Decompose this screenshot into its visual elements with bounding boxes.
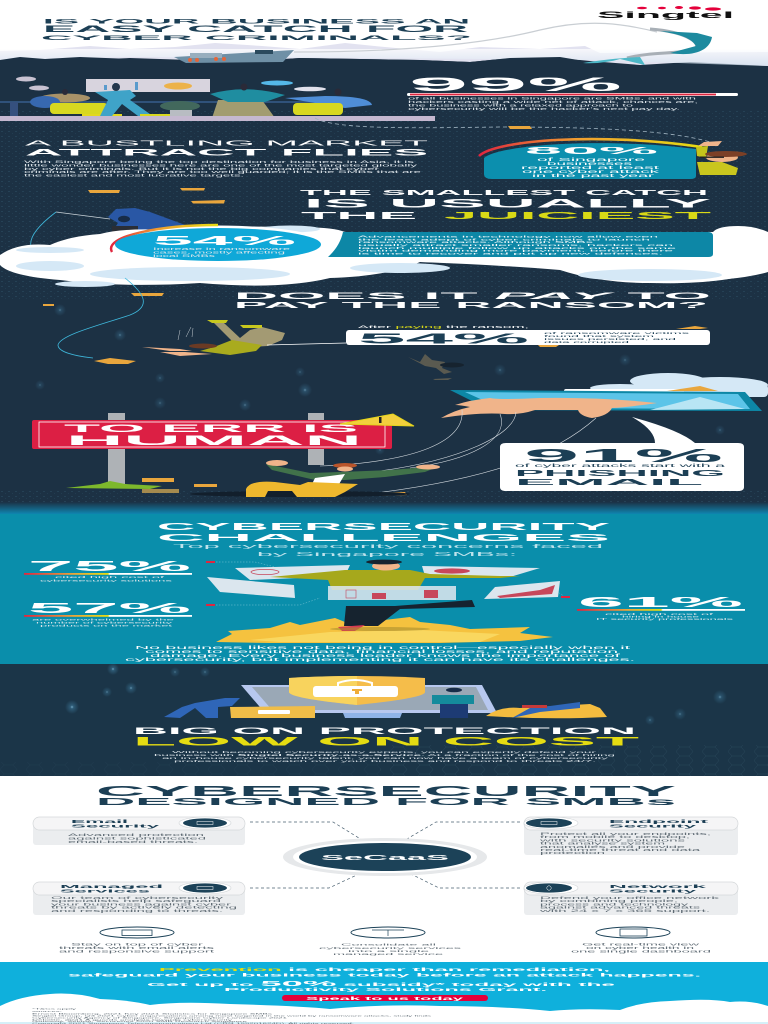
stat: 61%: [577, 594, 745, 621]
center node: SeCaaS: SeCaaS: [321, 853, 449, 862]
panel: ransomware paragraph: is time to recover and put up new defences.: [358, 251, 664, 255]
panel: network security: process and technology: [540, 902, 689, 906]
text: bustling market paragraph: little wonder businesses here are one of the most targeted globally: [24, 163, 419, 167]
panel: managed services: your business against cyber: [51, 902, 235, 906]
dashed connector: [315, 118, 710, 142]
puppet strings: [320, 410, 596, 496]
illustration: peeking person: [696, 141, 747, 175]
panel: network security: [524, 882, 738, 915]
panel: managed services: Services: [60, 889, 153, 894]
panel: 80% stat: [479, 139, 702, 179]
heading: smallest catch: IS USUALLY: [304, 198, 713, 210]
sign: to err is human: [32, 420, 392, 449]
heading: cybersecurity challenges: Top cybersecurity concerns faced: [173, 544, 603, 550]
benefit: email alerts: [59, 927, 215, 953]
benefit: single dashboard: on cyber health in: [586, 946, 694, 950]
panel: managed services: [33, 882, 245, 915]
button: speak to us today: [282, 995, 488, 1001]
panel: 54% pay ransom: data corrupted: [544, 340, 630, 344]
heading: cybersecurity challenges: by Singapore SMBs:: [257, 552, 519, 558]
stat: 99%: hackers casting a wide net of attack, chances are,: [408, 100, 698, 104]
panel: endpoint security: that analyse system: [540, 842, 666, 846]
illustration: giant hand: [441, 398, 657, 418]
text: challenges paragraph: damage. Every business leader knows the importance of: [150, 653, 624, 658]
panel: email security: Email: [71, 819, 128, 824]
stat badge: 54% ransomware increase: cases, mostly affecting: [153, 251, 286, 255]
text: challenges paragraph: comes to sensitive data, financial losses, and reputation: [145, 649, 621, 654]
panel: ransomware paragraph: [328, 232, 713, 257]
heading: a bustling market: ATTRACT FLIES: [25, 148, 431, 158]
panel: network security: Defend your office network: [540, 896, 721, 900]
panel: ransomware paragraph: ransomware attacks. Although SMBs: [358, 240, 595, 244]
panel: 54% pay ransom: issues persisted, and: [544, 337, 678, 341]
text: footnotes: Deloitte, 2021 A guards analysis towards cybersecurity: [32, 1018, 236, 1021]
stat: 57%: number of cybersecurity: [36, 620, 174, 624]
panel: endpoint security: Endpoint: [609, 819, 711, 824]
panel: 91% phishing email: EMAIL: [515, 477, 703, 487]
benefit: email alerts: threats with email alerts: [59, 946, 215, 950]
panel: 91% phishing email: of cyber attacks start with a: [515, 463, 728, 468]
callout line: [267, 343, 346, 345]
benefit: single dashboard: one single dashboard: [571, 949, 711, 953]
illustration: office team: [0, 76, 435, 121]
text: challenges paragraph: cybersecurity, but implementing it can have its challenges.: [125, 657, 635, 662]
benefit: single managed service: into a single: [348, 949, 430, 953]
stat: 99%: 99%: [409, 75, 623, 96]
panel: 80% stat: in the past year: [532, 173, 656, 178]
heading: smallest catch: JUICIEST: [444, 211, 711, 222]
heading: a bustling market: [25, 141, 432, 158]
background: glowing network dots: [0, 304, 768, 514]
heading: does it pay: DOES IT PAY TO: [234, 290, 711, 301]
gold pile: [216, 617, 553, 643]
illustration: falling victim: [142, 320, 285, 356]
text: challenges paragraph: No business likes not being in control—especially when it: [135, 645, 634, 650]
panel: email security: Security: [71, 824, 162, 828]
heading: smallest catch: [300, 188, 713, 222]
stat: 57%: 57%: [28, 600, 191, 617]
panel: managed services: Our team of cybersecurity: [51, 896, 225, 900]
panel: managed services: specialists help safeguard: [51, 899, 222, 903]
illustration: tablet: [450, 390, 762, 411]
section: cyan call to action background: [0, 962, 768, 1024]
stat badge: 54% ransomware increase: Increase in ransomware: [153, 247, 291, 251]
text: prevention message: [68, 967, 701, 993]
heading: does it pay: [234, 290, 711, 310]
illustration: sign posts: [108, 413, 324, 485]
panel: 54% pay ransom: [346, 325, 710, 348]
icon: warning triangle: [340, 414, 414, 426]
dashed connectors: [250, 822, 520, 888]
illustration: kneeling puppet person: [190, 460, 440, 497]
panel: email security: email-based threats.: [68, 840, 198, 844]
panel: endpoint security: Security: [609, 824, 699, 828]
heading: does it pay: PAY THE RANSOM?: [234, 301, 709, 310]
panel: managed services: Managed: [60, 884, 165, 889]
illustration: hooded hacker fishing: [31, 208, 188, 258]
logo: Singtel: Singtel: [597, 10, 734, 21]
sign: to err is human: HUMAN: [66, 433, 362, 448]
fishing line below cloud: [58, 278, 143, 358]
panel: endpoint security: real-time threat and data: [540, 848, 701, 852]
heading: cybersecurity challenges: CYBERSECURITY: [157, 522, 612, 533]
text: bustling market paragraph: the easiest and most lucrative targets.: [24, 174, 244, 178]
text: footnotes: Singtel Group, Q3 2021 Cyber organisations among most targeted in the world by ransomware attacks, study finds: [32, 1014, 431, 1017]
logo: Singtel: [597, 6, 734, 21]
benefit: email alerts: Stay on top of cyber: [71, 943, 207, 947]
panel: network security: Network: [609, 884, 709, 889]
stat: 61%: cited high cost of: [605, 612, 714, 616]
icon: envelope: [667, 386, 718, 391]
panel: ransomware paragraph: launch multiple follow up attacks on the same: [358, 246, 677, 250]
panel: network security: against advanced threats: [540, 906, 702, 910]
text: footnotes: *T&Cs apply: [32, 1008, 80, 1010]
stat: 61%: IT security professionals: [596, 617, 735, 621]
sign: to err is human: TO ERR IS: [64, 423, 358, 435]
panel: 91% phishing email: [500, 417, 744, 491]
panel: email security: Advanced protection: [68, 833, 204, 837]
benefit: single managed service: [319, 927, 463, 956]
text: bustling market paragraph: by cyber criminals. But it is not the big companies that cyber: [24, 167, 383, 171]
text: footnotes: sources:: [32, 1010, 64, 1013]
text: footnotes: Ernest Bloomberg, 2021 Key 2021 Statistics for Singapore SMBs: [32, 1012, 272, 1015]
clouds: footer: [0, 994, 768, 1024]
title: IS YOUR BUSINESS AN: [43, 18, 470, 26]
panel: 54% pay ransom: found that system: [544, 334, 656, 338]
heading: cybersecurity challenges: CHALLENGES: [157, 533, 612, 544]
heading: big on protection: [133, 726, 641, 748]
panel: endpoint security: [524, 817, 738, 855]
background: digital matrix texture: [0, 110, 768, 300]
text: protection paragraph: business with Singtel Security-as-a-Service . At a fraction of the cost of hiring: [154, 753, 616, 757]
heading: cybersecurity designed for SMBs: [96, 784, 678, 808]
title: EASY CATCH FOR: [43, 24, 470, 34]
panel: managed services: and responding to threats.: [51, 909, 223, 913]
text: footnotes: Gateway, Sektop, Securehex 2020 SMB Research Singapore: [32, 1020, 250, 1023]
panel: 54% pay ransom: After paying the ransom,: [358, 325, 529, 329]
illustration: standing man: [432, 688, 474, 718]
title: CYBER CRIMINALS?: [41, 35, 472, 42]
background: dark navy field: [0, 58, 768, 514]
heading: cybersecurity designed for SMBs: DESIGNED FOR SMBs: [96, 797, 678, 808]
text: bustling market paragraph: criminals are after. They are too well guarded; it is the SMBs that are: [24, 170, 422, 174]
benefit: single managed service: cybersecurity services: [319, 946, 463, 950]
panel: ransomware paragraph: the least adept of cyber criminals to launch: [358, 237, 651, 241]
panel: network security: by combining people,: [540, 899, 678, 903]
center node: SeCaaS: [283, 838, 487, 876]
text: prevention message: safeguard your business today before an attack happens.: [68, 972, 701, 978]
panel: endpoint security: anomalies and provide: [540, 845, 686, 849]
illustration: silhouette falling: [408, 354, 464, 380]
panel: endpoint security: from mobile to desktop,: [540, 835, 690, 839]
panel: network security: with 24 x 7 x 365 support.: [540, 909, 710, 913]
clouds: right: [564, 373, 768, 397]
text: prevention message: Get up to 50% subsidy* today with the: [147, 979, 617, 988]
stat: 99%: of all businesses in Singapore are SMBs, and with: [408, 96, 697, 100]
stat: 75%: 75%: [28, 558, 191, 575]
text: challenges paragraph: [125, 645, 635, 662]
heading: big on protection: BIG ON PROTECTION: [133, 726, 636, 736]
benefit: single managed service: managed service: [333, 952, 444, 956]
text: protection paragraph: professionals to watch over your business and respond to threats 24/7.: [174, 759, 597, 763]
heading: a bustling market: A BUSTLING MARKET: [25, 141, 432, 148]
panel: 91% phishing email: 91%: [524, 446, 723, 466]
panel: 80% stat: businesses: [547, 161, 635, 166]
panel: ransomware paragraph: Advancements in technology now allow even: [358, 235, 659, 239]
title: [41, 18, 472, 42]
panel: 54% pay ransom: of ransomware victims: [544, 331, 691, 335]
gold bar: [508, 126, 532, 129]
stat: 99%: cybersecurity will be the hacker's next pay day.: [408, 107, 680, 111]
gold bars: bottom: [142, 478, 407, 496]
clouds band: [0, 226, 768, 287]
benefit: single managed service: Consolidate all: [341, 943, 437, 947]
button: speak to us today: Speak to us today: [306, 996, 466, 1001]
panel: endpoint security: Protect all your endpoints,: [540, 832, 711, 836]
text: protection paragraph: [154, 750, 616, 763]
stat: 61%: hiring in house: [622, 615, 701, 619]
stat badge: 54% ransomware increase: local SMBs: [153, 254, 216, 258]
panel: 80% stat: reported at least: [521, 165, 662, 170]
panel: endpoint security: protection: [540, 851, 606, 855]
text: prevention message: Prevention is cheaper than remediation,: [159, 967, 613, 973]
stat badge: 54% ransomware increase: [108, 225, 328, 264]
stat: 61%: 61%: [578, 594, 743, 611]
panel: email security: against sophisticated: [68, 837, 206, 841]
benefit: single dashboard: [571, 927, 711, 953]
heading: cybersecurity designed for SMBs: CYBERSECURITY: [96, 784, 678, 800]
section: white services background: [0, 776, 768, 963]
stat: 75%: cited high cost of: [55, 575, 165, 579]
heading: cybersecurity challenges: [157, 522, 612, 558]
benefit: email alerts: and responsive support: [59, 949, 214, 953]
text: footnotes: Cybersecurity Agency of Singapore, Singapore Cyber Landscape 2021: [32, 1016, 290, 1019]
heading: big on protection: LOW ON COST: [133, 734, 641, 748]
mountains horizon: [0, 43, 768, 76]
panel: ransomware paragraph: usually attract smaller ransoms, hackers can: [358, 243, 674, 247]
text: bustling market paragraph: With Singapore being the top destination for business in Asia, it is: [24, 160, 416, 164]
panel: 54% pay ransom: 54%: [358, 330, 529, 348]
illustration: monitor with shield: [241, 676, 497, 718]
section: cybersecurity challenges background: [0, 514, 768, 665]
stat: 99%: [407, 75, 738, 111]
benefit: single dashboard: Get real-time view: [582, 943, 701, 947]
heading: smallest catch: THE SMALLEST CATCH: [300, 188, 708, 197]
connector dots: [206, 561, 570, 606]
panel: endpoint security: with security solutions: [540, 838, 687, 842]
grass: [66, 481, 162, 489]
gold bars: upper: [43, 188, 350, 306]
panel: ransomware paragraph: victim demanding more payment, before there: [358, 249, 674, 253]
stat badge: 54% ransomware increase: 54%: [153, 233, 298, 248]
stat: 57%: products on the market: [40, 623, 173, 627]
text: footnotes: [32, 1008, 431, 1024]
panel: managed services: threats by actively detecting: [51, 906, 238, 910]
panel: 80% stat: 80%: [525, 145, 662, 157]
panel: email security: [33, 817, 245, 845]
ship: [174, 50, 294, 63]
panel: 80% stat: one cyber attack: [522, 169, 662, 174]
illustration: person with folder: [164, 698, 315, 718]
background: hexagon grid and sparks: [0, 663, 768, 776]
text: protection paragraph: Without becoming cybersecurity experts, you can expertly defend your: [172, 750, 596, 754]
fishing line and hooked fish: [294, 23, 712, 65]
gold bars: middle: [94, 326, 708, 364]
panel: 80% stat: of Singapore: [537, 157, 647, 162]
stat: 57%: are overwhelmed by the: [32, 617, 175, 621]
background: white header sky: [0, 0, 768, 70]
section: big on protection background: [0, 664, 768, 776]
stat: 99%: the business with a relaxed approach to: [408, 104, 634, 108]
stat: 75%: [24, 558, 192, 582]
illustration: challenged person with floating panels: [207, 560, 560, 631]
heading: smallest catch: THE: [301, 211, 419, 222]
text: bustling market paragraph: [24, 160, 422, 178]
stat: 75%: cybersecurity solutions: [40, 578, 174, 582]
panel: 91% phishing email: PHISHING: [515, 468, 727, 478]
panel: network security: Security: [609, 889, 699, 894]
text: protection paragraph: an in-house cybersecurity talent, you can now have a team of cybersecurity: [162, 756, 610, 760]
text: prevention message: Productivity Solutions Grant.: [224, 987, 547, 993]
stat: 57%: [24, 600, 192, 627]
illustration: person on gold bag: [486, 702, 607, 718]
